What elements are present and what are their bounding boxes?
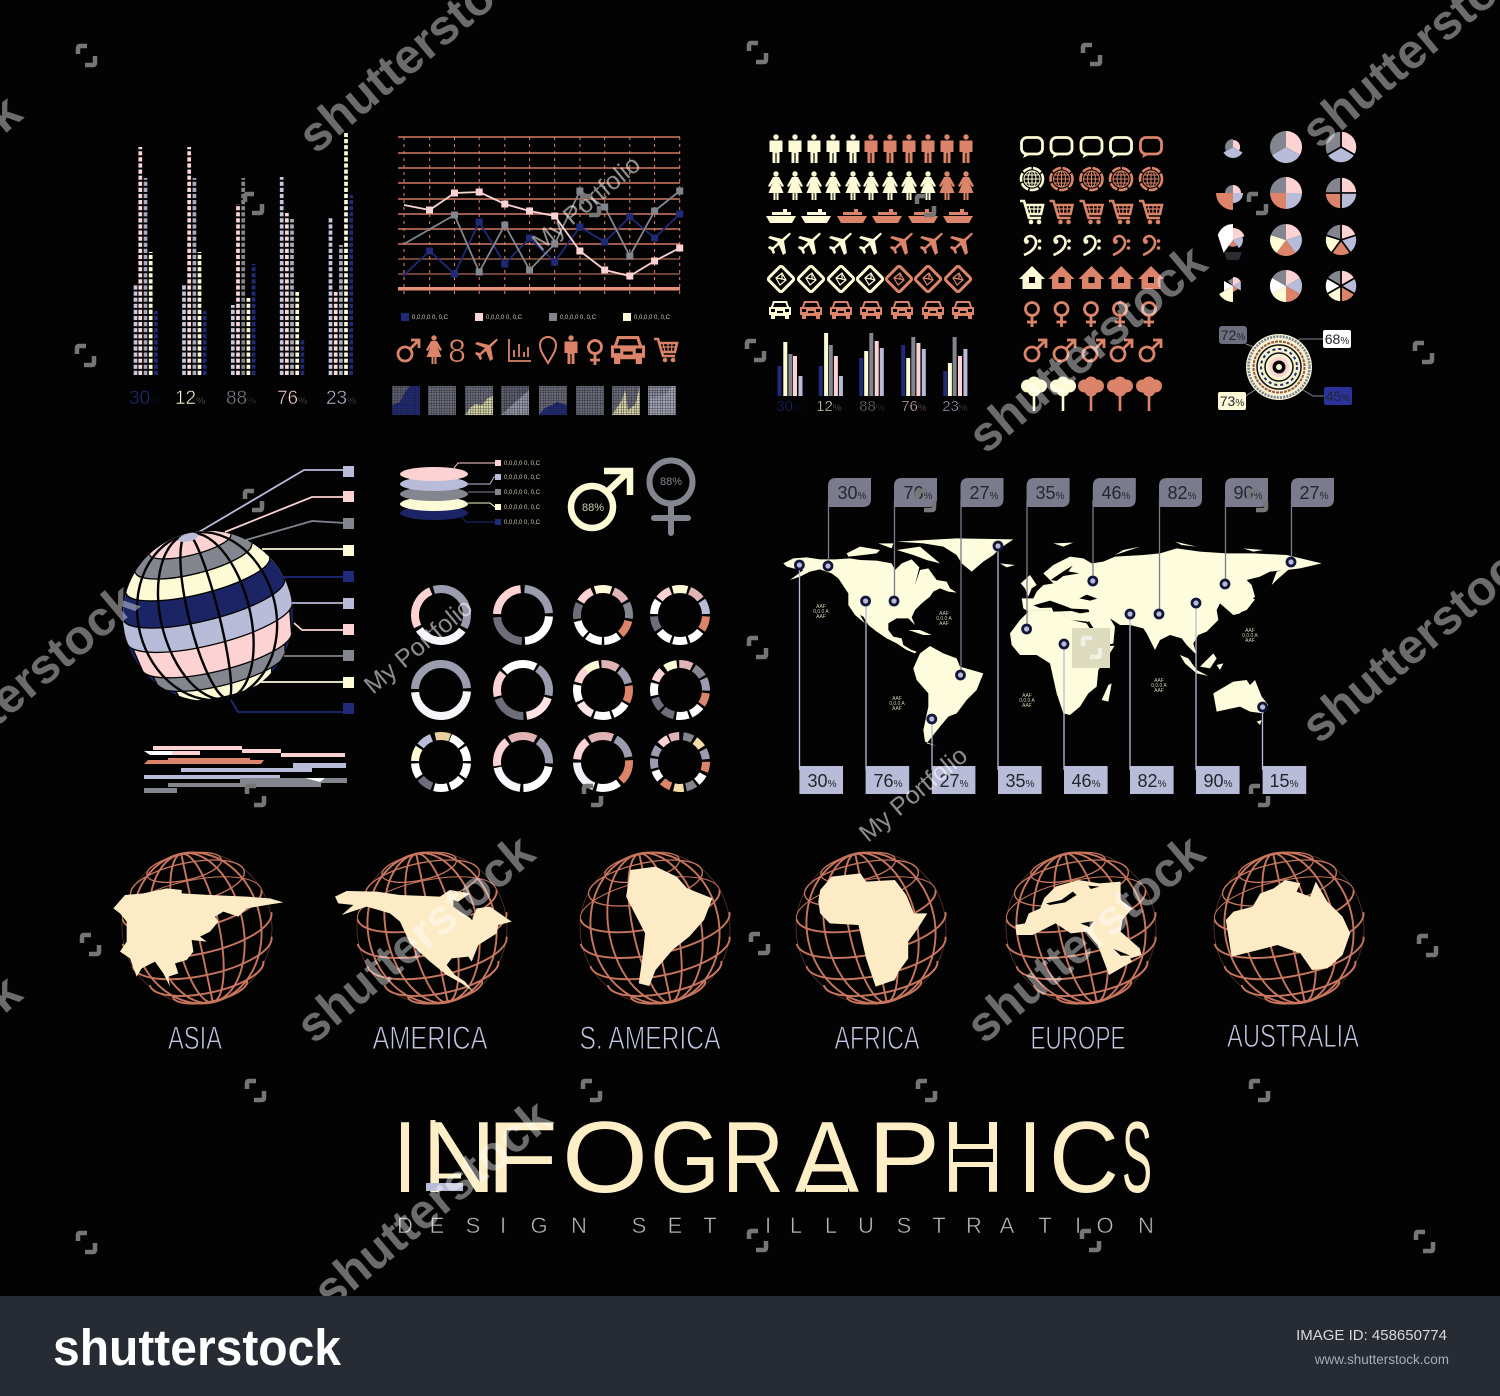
concentric ring chart xyxy=(1218,326,1352,410)
ocean captions: AAF xyxy=(1022,703,1032,709)
watermarks: My Portfolio xyxy=(854,741,973,848)
label 68%: 68% xyxy=(1325,331,1349,347)
title: H xyxy=(942,1102,1004,1214)
line chart legend xyxy=(401,313,671,321)
icon: location pin xyxy=(540,337,556,363)
donut r1c2 xyxy=(497,589,549,641)
ocean captions: 0,0.0 A xyxy=(889,701,905,707)
ocean captions: AAF xyxy=(939,621,949,627)
world map with callouts xyxy=(783,478,1334,794)
globe: Asia: ASIA xyxy=(168,1020,222,1056)
stack legend items: 0,0,0,0 0, 0,C xyxy=(504,520,541,526)
top callout flags: 90% xyxy=(1234,483,1263,503)
watermarks: shutterstock xyxy=(956,824,1215,1053)
globe: Australia xyxy=(1199,838,1379,1054)
globe: America: AMERICA xyxy=(372,1020,488,1056)
stack legend items: 0,0,0,0 0, 0,C xyxy=(504,461,541,467)
globe: Africa xyxy=(781,838,961,1056)
text: S xyxy=(1122,1102,1152,1214)
ocean captions: AAF xyxy=(939,611,949,617)
top callout flags: 30% xyxy=(838,483,867,503)
title: A xyxy=(795,1102,860,1214)
stack legend items: 0,0,0,0 0, 0,C xyxy=(504,490,541,496)
ships row xyxy=(766,209,973,223)
bottom callout boxes: 30% xyxy=(808,771,837,791)
line chart legend: 0,0,0,0 0, 0,C xyxy=(634,315,671,321)
stack legend items: 0,0,0,0 0, 0,C xyxy=(504,475,541,481)
solid pies xyxy=(1270,131,1302,302)
label 73%: 73% xyxy=(1220,393,1244,409)
line chart legend: 0,0,0,0 0, 0,C xyxy=(560,315,597,321)
speech bubbles xyxy=(1022,138,1162,158)
ocean captions: 0,0.0 A xyxy=(1242,633,1258,639)
pie charts xyxy=(1216,131,1357,302)
ocean captions: 0,0.0 A xyxy=(936,616,952,622)
mini grid chart thumbnails xyxy=(392,386,676,415)
small bar percentages: 12% xyxy=(816,398,842,415)
orange icon row xyxy=(398,333,677,369)
bar chart percentages: 12% xyxy=(175,388,205,409)
pictogram grid xyxy=(766,134,974,319)
bottom callout boxes: 76% xyxy=(874,771,903,791)
line chart xyxy=(398,137,683,296)
website: www.shutterstock.com xyxy=(1314,1352,1449,1367)
carts xyxy=(1020,201,1162,224)
icon: digit 8: 8 xyxy=(448,333,466,369)
big male symbol: 88% xyxy=(582,502,604,514)
ocean captions: AAF xyxy=(892,696,902,702)
women row xyxy=(768,171,974,200)
globe: South America xyxy=(565,838,745,1056)
title: P xyxy=(868,1102,940,1214)
top callout flags: 46% xyxy=(1102,483,1131,503)
stack legend items xyxy=(495,460,541,526)
small bar percentages: 23% xyxy=(942,398,968,415)
envelopes row xyxy=(768,266,971,292)
leader squares xyxy=(343,466,354,714)
icon: small chart xyxy=(509,339,531,361)
label 72%: 72% xyxy=(1221,327,1245,343)
ocean captions: AAF xyxy=(1154,678,1164,684)
small bar percentages: 76% xyxy=(901,398,927,415)
map: Americas and Greenland xyxy=(783,538,1015,746)
donut r1c1 xyxy=(415,589,467,641)
watermarks: shutterstock xyxy=(958,234,1217,463)
ocean captions: AAF xyxy=(1245,628,1255,634)
female symbols xyxy=(1026,302,1156,327)
title: N xyxy=(422,1102,496,1214)
title: G xyxy=(650,1102,720,1214)
ocean captions: AAF xyxy=(816,604,826,610)
image id: IMAGE ID: 458650774 xyxy=(1296,1327,1447,1344)
bar group 76% xyxy=(282,177,302,375)
striped sphere with leaders xyxy=(123,466,354,714)
bottom callout boxes: 46% xyxy=(1072,771,1101,791)
small bar percentages: 30% xyxy=(776,398,802,415)
bottom callout boxes: 35% xyxy=(1006,771,1035,791)
ocean captions: 0,0.0 A xyxy=(813,609,829,615)
bottom callout stems xyxy=(800,546,1262,770)
map: Old World xyxy=(1010,542,1322,725)
bottom callout boxes: 82% xyxy=(1138,771,1167,791)
top callout flags: 27% xyxy=(1300,483,1329,503)
bar group 12% xyxy=(184,147,205,375)
title xyxy=(393,1102,1152,1214)
dotted bar charts xyxy=(136,133,351,375)
bottom callout boxes: 27% xyxy=(940,771,969,791)
ocean captions: 0,0.0 A xyxy=(1019,698,1035,704)
donut r3c1 xyxy=(415,736,467,788)
big female symbol: 88% xyxy=(660,476,682,488)
top callout flags: 27% xyxy=(970,483,999,503)
top callout flags xyxy=(828,478,1334,507)
world map xyxy=(783,538,1322,746)
trees xyxy=(1021,376,1162,411)
donut r2c2 xyxy=(497,664,549,716)
globe: Australia: AUSTRALIA xyxy=(1227,1018,1359,1054)
series grey xyxy=(404,188,683,276)
title: I xyxy=(393,1102,417,1214)
top callout stems xyxy=(828,500,1292,675)
bottom callout boxes: 15% xyxy=(1270,771,1299,791)
top callout flags: 76% xyxy=(904,483,933,503)
small bar percentages: 88% xyxy=(859,398,885,415)
title: R xyxy=(722,1102,784,1214)
title: F xyxy=(486,1102,558,1214)
male symbols xyxy=(1025,340,1161,361)
ocean captions: 0,0.0 A xyxy=(1151,683,1167,689)
separated pies xyxy=(1325,131,1357,302)
bottom callout boxes xyxy=(799,766,1306,794)
donut r2c4 xyxy=(654,664,706,716)
ocean captions: AAF xyxy=(892,706,902,712)
globe: America xyxy=(335,838,522,1056)
bar group 30% xyxy=(136,147,156,375)
leader lines xyxy=(199,470,345,712)
ocean captions: AAF xyxy=(1245,638,1255,644)
watermarks: My Portfolio xyxy=(527,150,646,257)
title: C xyxy=(1049,1102,1119,1214)
donut r2c1 xyxy=(415,664,467,716)
title: O xyxy=(562,1102,648,1214)
globe: Asia xyxy=(107,838,287,1056)
donut r2c3 xyxy=(577,664,629,716)
watermarks: shutterstock xyxy=(286,824,545,1053)
planes row xyxy=(768,233,973,255)
ocean captions xyxy=(813,604,1258,712)
globe: Europe: EUROPE xyxy=(1030,1020,1126,1056)
donut r3c3 xyxy=(577,736,629,788)
exploded pies xyxy=(1216,139,1244,302)
label 45%: 45% xyxy=(1326,388,1350,404)
title: I xyxy=(1018,1102,1042,1214)
bar chart percentages: 76% xyxy=(277,388,307,409)
series navy xyxy=(403,210,683,278)
icon columns xyxy=(1019,138,1164,411)
segmented bars strip xyxy=(144,746,347,793)
bar chart percentages: 30% xyxy=(129,388,159,409)
houses xyxy=(1019,266,1164,289)
small bar charts xyxy=(776,333,968,415)
bottom callout boxes: 90% xyxy=(1204,771,1233,791)
donut r3c2 xyxy=(497,736,549,788)
ocean captions: AAF xyxy=(1154,688,1164,694)
ocean captions: AAF xyxy=(1022,693,1032,699)
donut r1c3 xyxy=(577,589,629,641)
bar group 88% xyxy=(233,178,254,375)
footer bar xyxy=(0,1296,1500,1396)
men row xyxy=(770,134,972,163)
ocean captions: AAF xyxy=(816,614,826,620)
bar chart percentages: 88% xyxy=(226,388,256,409)
footer logo: shutterstock xyxy=(53,1319,342,1376)
line chart legend: 0,0,0,0 0, 0,C xyxy=(412,315,449,321)
bass clefs xyxy=(1024,236,1160,255)
globe: Europe xyxy=(991,838,1171,1056)
cars row xyxy=(769,301,974,319)
watermarks: shutterstock xyxy=(303,1089,562,1318)
small bar percentages xyxy=(776,398,968,415)
globe: Africa: AFRICA xyxy=(834,1020,920,1056)
bar chart percentages: 23% xyxy=(326,388,356,409)
series pink xyxy=(404,188,683,280)
top callout flags: 82% xyxy=(1168,483,1197,503)
layered stack legend xyxy=(400,460,541,526)
subtitle: DESIGNSETILLUSTRATION xyxy=(397,1213,1154,1238)
sphere xyxy=(123,531,293,701)
stack legend items: 0,0,0,0 0, 0,C xyxy=(504,505,541,511)
big male symbol xyxy=(571,471,630,528)
top callout flags: 35% xyxy=(1036,483,1065,503)
line chart legend: 0,0,0,0 0, 0,C xyxy=(486,315,523,321)
donut charts xyxy=(415,589,706,788)
letter accents xyxy=(433,1120,461,1176)
donut r1c4 xyxy=(654,589,706,641)
globes xyxy=(1021,168,1162,190)
watermarks: My Portfolio xyxy=(359,593,478,700)
donut r3c4 xyxy=(654,736,706,788)
bar chart percentages xyxy=(129,388,356,409)
big female symbol xyxy=(650,460,692,533)
bar group 23% xyxy=(330,133,351,375)
globe: South America: S. AMERICA xyxy=(580,1020,721,1056)
map markers xyxy=(795,542,1295,723)
continent globes xyxy=(107,838,1379,1056)
